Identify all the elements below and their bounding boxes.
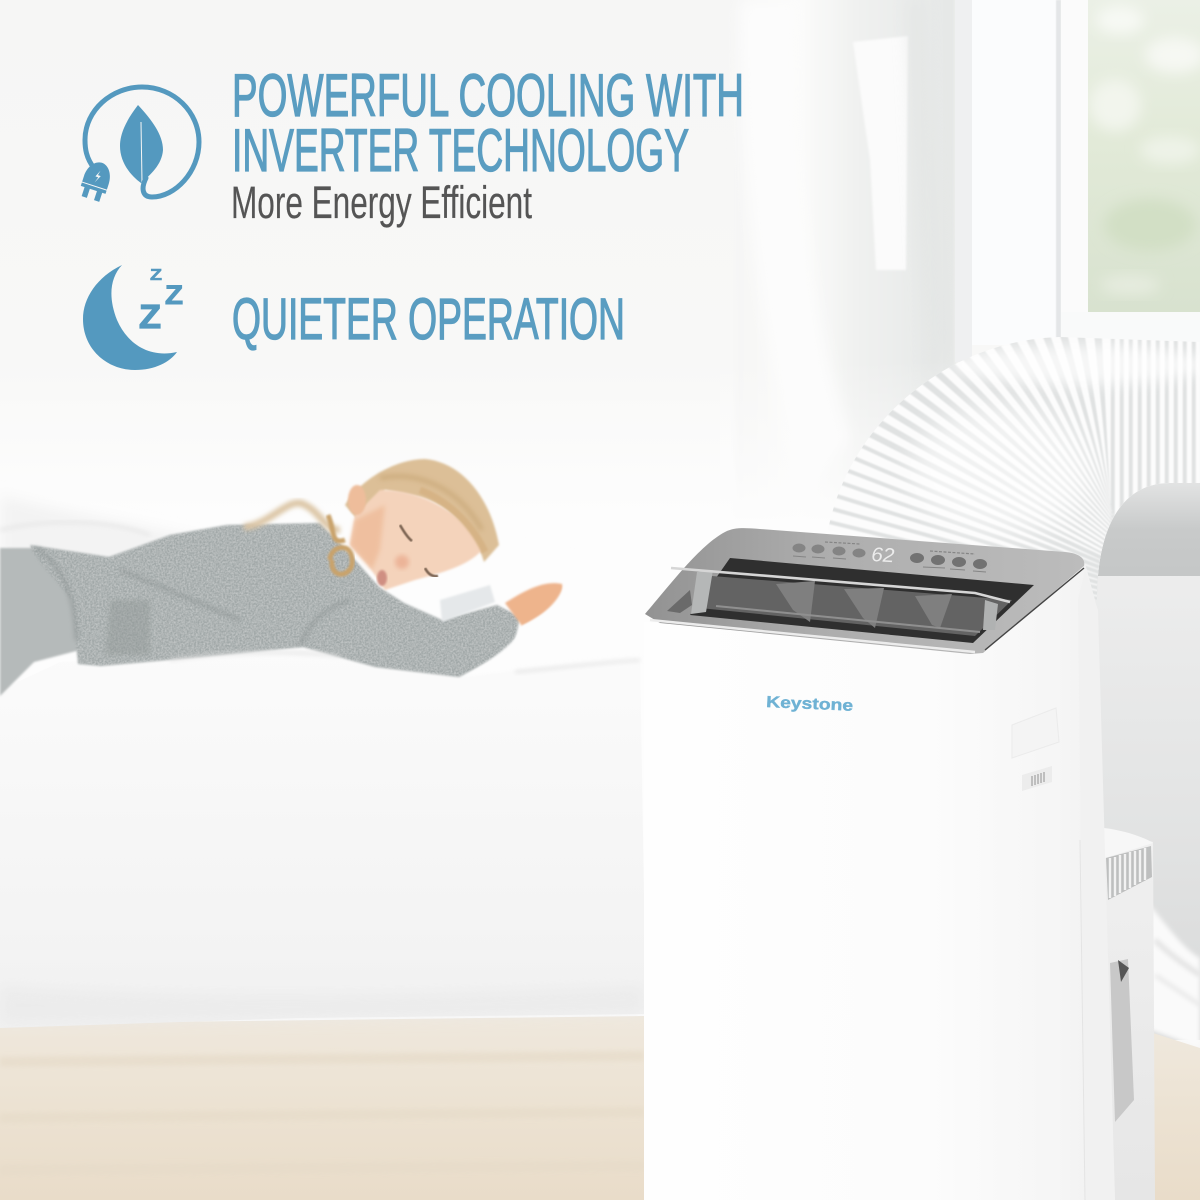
- open flap bars: [671, 568, 1010, 602]
- girl hair: [345, 459, 499, 562]
- side barcode sticker: [1022, 766, 1052, 791]
- sweater shadows: [36, 548, 350, 645]
- back blanket on bed: [0, 495, 225, 575]
- shadow under duct: [1097, 483, 1200, 600]
- curtain folds at lower right: [1150, 905, 1200, 1048]
- wall behind unit: [1080, 480, 1200, 1040]
- cheek shading: [350, 505, 385, 570]
- icon: plug and leaf: [78, 87, 199, 203]
- rear unit section: [1100, 828, 1155, 1200]
- girl pants: [0, 548, 80, 696]
- control buttons right: [910, 553, 987, 569]
- folded white blanket by hand: [463, 572, 660, 677]
- window frame: [955, 0, 1200, 362]
- back pillow: [392, 534, 660, 640]
- icon: moon with zzz: Z: [150, 267, 162, 284]
- left hinge: [691, 570, 713, 614]
- headline: powerful cooling: POWERFUL COOLING WITH: [232, 62, 744, 129]
- girl hand: [505, 583, 563, 626]
- Keystone logo: Keystone: [766, 694, 854, 715]
- bed lower edge shading: [0, 985, 644, 1024]
- leaf: [120, 105, 163, 183]
- headline: quieter operation: QUIETER OPERATION: [232, 287, 625, 352]
- side handle recess: [1012, 708, 1059, 758]
- girl eye and lips: [377, 525, 438, 586]
- control buttons left: [792, 544, 866, 558]
- curtain: [720, 0, 960, 530]
- sleeping girl: [0, 459, 563, 696]
- right hinge: [983, 600, 998, 630]
- plug: [78, 159, 114, 203]
- bed mattress: [0, 650, 646, 1028]
- warning triangle on label: [1118, 960, 1129, 982]
- blanket fold line: [0, 522, 150, 535]
- icon: moon with zzz: Z: [139, 298, 161, 335]
- bed fold shadows: [170, 653, 640, 672]
- air conditioner body: [644, 563, 1115, 1200]
- silver top panel: [645, 528, 1084, 654]
- temperature display: 62: [871, 544, 895, 567]
- hair over forehead: [420, 490, 485, 552]
- girl sweater: [30, 523, 520, 677]
- window view of trees: [1088, 0, 1200, 312]
- cord: [85, 87, 199, 197]
- left panel cutout: [667, 590, 692, 613]
- rear vent: [1106, 846, 1152, 900]
- girl face: [350, 490, 484, 590]
- headline: powerful cooling: INVERTER TECHNOLOGY: [232, 117, 689, 184]
- icon: moon with zzz: [83, 265, 183, 370]
- dark air outlet: [690, 558, 1034, 643]
- subheading: More Energy Efficient: [231, 177, 532, 228]
- floor: [0, 1016, 1200, 1200]
- icon: moon with zzz: Z: [165, 280, 183, 310]
- hair wisps: [244, 503, 340, 530]
- pillow shadow: [440, 585, 495, 622]
- barcode lines: [1032, 772, 1044, 786]
- headline: powerful cooling: [232, 62, 744, 184]
- flexible exhaust duct: [830, 337, 1200, 600]
- hair curl: [328, 515, 352, 574]
- rating label: [1110, 959, 1134, 1122]
- girl ear: [348, 485, 366, 515]
- louver fins: [776, 581, 952, 628]
